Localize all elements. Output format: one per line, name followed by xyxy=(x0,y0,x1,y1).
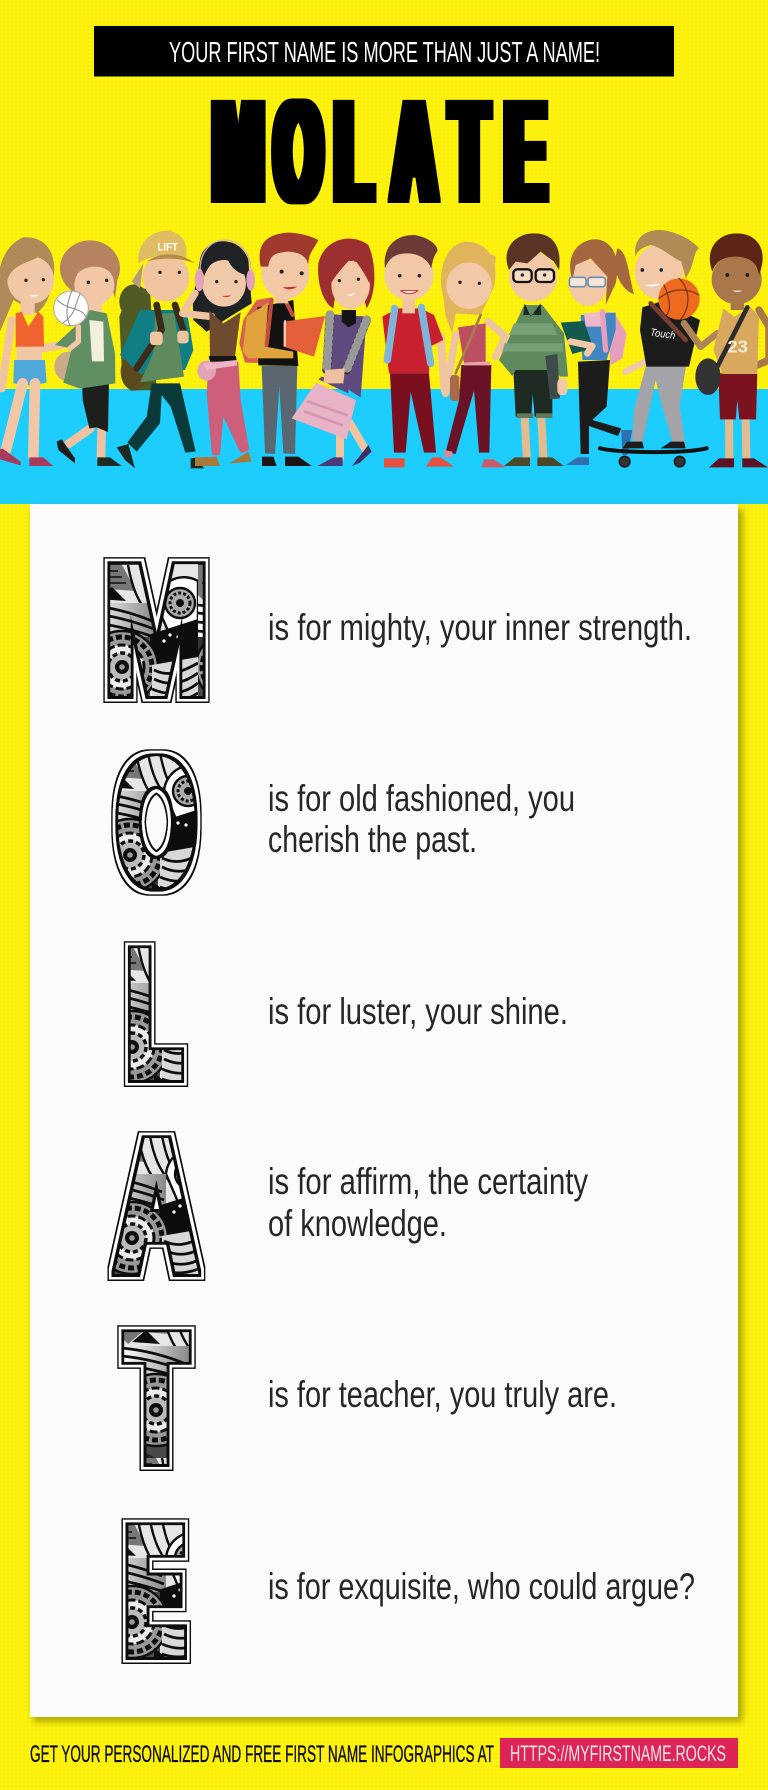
character: boy with curly hair and tank top: 23 xyxy=(727,337,748,357)
text: A meaning: of knowledge. xyxy=(268,1203,447,1244)
character: boy in red shirt xyxy=(382,235,454,467)
text: A meaning: is for affirm, the certainty xyxy=(268,1161,588,1202)
illustration: row of students, left half xyxy=(0,231,374,468)
row: letter T xyxy=(126,1299,617,1497)
ornamental letter T: T xyxy=(126,1299,187,1497)
row: letter M xyxy=(104,527,692,732)
character: girl with volleyball xyxy=(54,240,122,466)
panel: white card shadow xyxy=(33,509,743,1722)
character: blonde girl xyxy=(441,242,506,467)
character: girl with pink case xyxy=(292,239,374,466)
ornamental letter M: M xyxy=(104,527,209,732)
blue floor band xyxy=(0,389,768,504)
text: L meaning: is for luster, your shine. xyxy=(268,991,568,1032)
text: A meaning xyxy=(268,1161,588,1244)
character: girl with ponytail and tablet xyxy=(561,239,634,465)
ornamental letter A: A xyxy=(116,1103,197,1308)
title: name: MOLATE xyxy=(213,72,545,232)
character: boy with curly hair and tank top xyxy=(695,233,768,467)
text: O meaning: cherish the past. xyxy=(268,819,477,860)
character: girl in orange top xyxy=(0,237,78,466)
character: boy with glasses and green sweater xyxy=(499,233,568,466)
ornamental letter O: O xyxy=(117,725,196,919)
row: letter O xyxy=(117,725,575,919)
character: skateboarder with basketball: Touch xyxy=(649,327,676,342)
row: letter L: L xyxy=(127,915,181,1113)
row: letter A xyxy=(116,1103,588,1308)
header banner xyxy=(94,26,674,76)
text: T meaning: is for teacher, you truly are. xyxy=(268,1374,617,1415)
text: O meaning: is for old fashioned, you xyxy=(268,778,575,819)
character: girl with headphones xyxy=(183,240,255,466)
character: boy with red hair and book xyxy=(239,233,325,466)
ornamental letter E: E xyxy=(125,1492,185,1690)
character: boy with cap and backpack: LIFT xyxy=(157,242,178,254)
row: letter E xyxy=(125,1492,695,1690)
illustration: row of students, right half xyxy=(382,230,768,467)
panel: white card xyxy=(30,504,738,1717)
character: skateboarder with basketball xyxy=(600,230,717,467)
text: O meaning xyxy=(268,778,575,860)
row: letter L xyxy=(127,915,568,1113)
character: boy with cap and backpack xyxy=(117,231,204,468)
